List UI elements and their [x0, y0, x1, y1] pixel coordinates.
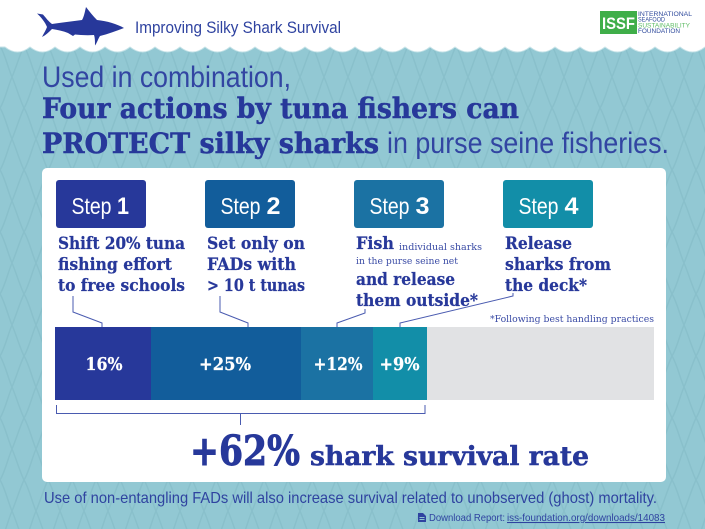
step 3 badge: Step [370, 193, 410, 219]
download link: iss-foundation.org/downloads/14083 [507, 512, 665, 524]
bar: remainder [427, 327, 654, 400]
footnote: *Following best handling practices [490, 315, 654, 325]
step 2 text [207, 234, 305, 295]
main heading: in purse seine fisheries. [387, 127, 669, 160]
step 1 [56, 180, 185, 295]
icon: document [418, 513, 426, 522]
panel: steps and survival chart [42, 168, 666, 482]
step 1 badge: Step [72, 193, 112, 219]
leader lines from steps to bar [73, 293, 513, 327]
step 2 badge [205, 180, 295, 228]
step 2 [205, 180, 305, 295]
step 2 badge: 2 [266, 193, 280, 220]
step 2 text: FADs with [207, 255, 296, 274]
logo mark: ISSF [602, 14, 635, 33]
step 1 text: to free schools [58, 276, 185, 295]
step 4 badge: Step [518, 193, 558, 219]
main heading: Used in combination, [42, 61, 291, 94]
survival rate callout: shark survival rate [310, 442, 589, 472]
footer note: Use of non-entangling FADs will also increase survival related to unobserved (ghost) mortality. [44, 490, 657, 507]
logo wordmark: FOUNDATION [638, 28, 680, 35]
main heading: Four actions by tuna fishers can [42, 92, 519, 125]
bar: step 1: 16% [86, 354, 122, 375]
step 4 text: Release [505, 234, 572, 253]
bar: step 3 [301, 327, 373, 400]
step 3 badge: 3 [416, 193, 430, 220]
logo wordmark [638, 11, 692, 35]
bar: step 4 [373, 327, 427, 400]
step 3 text: Fish [356, 234, 394, 253]
logo wordmark: SEAFOOD [638, 16, 665, 24]
step 1 badge: 1 [117, 193, 129, 220]
bracket under bar [56, 405, 425, 425]
step 3 text [356, 234, 482, 310]
bar: step 1 [55, 327, 151, 400]
icon: shark silhouette [37, 7, 124, 46]
step 4 text: the deck* [505, 276, 587, 295]
step 3 text: in the purse seine net [356, 257, 458, 267]
step 4 badge: 4 [564, 193, 579, 220]
step 3 badge [354, 180, 444, 228]
bar: step 4: +9% [380, 354, 420, 375]
logo: ISSF [600, 11, 692, 35]
survival rate callout [190, 427, 589, 475]
step 1 text: fishing effort [58, 255, 172, 274]
step 2 text: > 10 t tunas [207, 276, 305, 295]
step 3 [354, 180, 482, 310]
download link: Download Report: [429, 512, 505, 524]
header: white band with scalloped wave edge [0, 0, 705, 52]
step 1 text [58, 234, 185, 295]
header title: Improving Silky Shark Survival [135, 18, 341, 37]
survival rate callout: +62% [190, 427, 300, 475]
download link [418, 512, 665, 524]
step 1 badge [56, 180, 146, 228]
stacked bar chart [55, 327, 654, 400]
step 3 text: and release [356, 270, 455, 289]
logo wordmark: SUSTAINABILITY [638, 22, 691, 30]
step 4 [503, 180, 612, 295]
step 2 badge: Step [220, 193, 260, 219]
step 4 badge [503, 180, 593, 228]
logo wordmark: INTERNATIONAL [638, 11, 692, 18]
step 4 text: sharks from [505, 255, 612, 274]
step 3 text: them outside* [356, 291, 478, 310]
main heading: PROTECT silky sharks [42, 127, 379, 160]
bar: step 2 [151, 327, 301, 400]
step 3 text: individual sharks [399, 243, 482, 253]
step 1 text: Shift 20% tuna [58, 234, 185, 253]
main heading [42, 61, 669, 160]
bar: step 2: +25% [199, 354, 251, 375]
step 4 text [505, 234, 612, 295]
bar: step 3: +12% [314, 354, 362, 375]
step 2 text: Set only on [207, 234, 305, 253]
